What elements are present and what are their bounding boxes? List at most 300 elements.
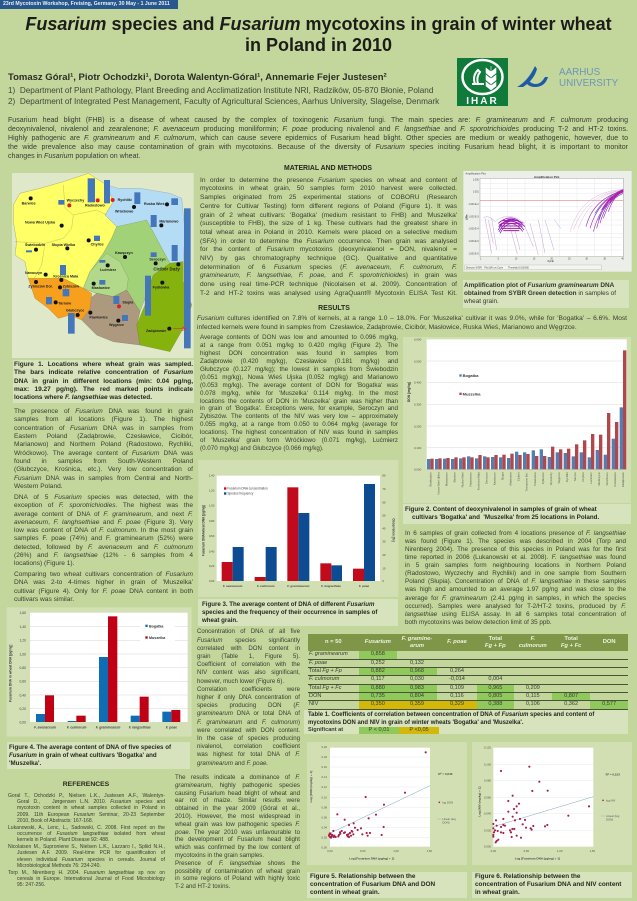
chart: Figure 2 bar chart: Zybiszów (541, 471, 545, 484)
chart: Figure 6 scatter plot: 0,000 (484, 845, 491, 849)
table: correlation coefficients: 0,359 (410, 701, 424, 707)
chart: Figure 3 bar chart: Occurrence [%] (391, 518, 395, 542)
table: correlation coefficients: 0,030 (410, 676, 424, 682)
text: DON results: 0.055 mg/kg, at a range from 0.050 to 0.064 mg/kg (average for (200, 421, 398, 428)
text: species and the frequency of their occurrence in samples of (202, 609, 377, 616)
text: Figure 5. Relationship between the (310, 873, 415, 880)
text: DON results: (0.053 mg/kg). The average content of DON for 'Bogatka' was (200, 382, 398, 389)
caption: Figure 3 (198, 599, 398, 626)
chart: Figure 2 bar chart: 0,400 (414, 381, 422, 385)
text: comparing cultivars: cultivar (Figure 4). Only for F. poae DNA content in both (14, 588, 193, 595)
affiliations (8, 86, 440, 106)
text: material and methods: mycotoxins in wheat grain, 50 samples form 2010 harvest were collected. (200, 185, 457, 192)
title: in Poland in 2010 (245, 34, 392, 54)
table: correlation coefficients: Fg + Fc (561, 643, 581, 649)
table: correlation coefficients: 0,807 (564, 693, 578, 699)
chart: amplification plot: ΔRn (464, 214, 468, 220)
text: F. langsethiae results: In 6 samples of grain collected from 4 locations presence of F. langsethiae (405, 530, 626, 537)
text: results intro (197, 315, 627, 331)
chart: Figure 3 bar chart: F. langsethiae (321, 584, 341, 588)
text: Fusarium DNA presence: Marianowo) and Northern Poland (Radostowo, Rychliki, (14, 441, 193, 448)
chart: amplification plot: Amplification Plot (465, 171, 486, 175)
chart: Figure 5 scatter plot: 0,00 (327, 849, 333, 853)
text: comparing cultivars: Comparing two wheat cultivars concentration of Fusarium (14, 571, 193, 578)
table: correlation coefficients (308, 634, 628, 710)
text: F. langsethiae results: was high and amounted to an average 1.97 pg/ng and was close to the (405, 586, 626, 593)
text: material and methods: determination of 6 Fusarium species (F. avenaceum, F. culmorum, F. (200, 264, 457, 271)
text: correlation discussion: correlated with DON content in (197, 645, 300, 652)
chart: Figure 2 bar chart: Radostowo (468, 472, 472, 486)
chart: Figure 5 scatter plot: DON) (442, 820, 450, 824)
text: material and methods: graminearum, F. langsethiae, F. poae, and F. sporotrichioides) in grain was (200, 272, 457, 279)
references list: Goral T., Ochodzki P., Nielsen L.K., Justesen A.F., Walentyn- (8, 792, 165, 798)
table: correlation coefficients: 0,735 (371, 693, 385, 699)
chart: Figure 4 bar chart: F. poae (166, 725, 177, 729)
chart: Figure 4 bar chart: 1,40 (20, 625, 26, 629)
chart: Figure 4 bar chart: F. culmorum (67, 725, 87, 729)
chart: Figure 2 bar chart: Cicibór (516, 472, 520, 481)
references list: Goral D., Jørgensen L.N. 2010. Fusarium species and (17, 799, 165, 805)
references list: 95: 247-256. (17, 882, 45, 888)
text: five species detected: exception of F. sporotrichiodies. The highest was the (14, 502, 193, 509)
text: correlation discussion: NIV content was also significant, (197, 669, 300, 676)
chart: Figure 3 bar chart: 1,40 (209, 474, 215, 478)
text: F. langsethiae results: average for F. graminearum (2.41 pg/ng in samples, in which the species (405, 594, 626, 602)
chart: Figure 3 bar chart: F. graminearum (287, 584, 310, 588)
text: Fusarium in grain of wheat cultivars 'Bogatka' and (9, 752, 157, 759)
text: five species detected: (26%) and F. langsethiae (12% - 6 samples from 4 (14, 552, 193, 559)
text: conclusions: the development of Fusarium head blight (175, 836, 300, 843)
chart: Figure 2 bar chart: Słupia (500, 472, 504, 480)
chart: Figure 3 bar chart: F. avenaceum (223, 584, 243, 588)
text: wheat grain. (464, 298, 499, 305)
table: correlation coefficients: 0,804 (410, 693, 424, 699)
text: correlation discussion: species producing DON (F. (197, 702, 300, 709)
text: max: 19.27 pg/ng). The red marked points indicate (14, 386, 193, 393)
text: conclusions: causing Fusarium head blight of wheat and (175, 790, 300, 797)
text: material and methods: In order to determine the presence Fusarium species on wheat and content of (200, 177, 457, 184)
chart: amplification plot: 1.000 E-2 (469, 204, 479, 206)
chart: Figure 3 bar chart: F. poae (359, 584, 369, 588)
chart: Figure 2 bar chart: DON [mg/kg] (407, 382, 411, 402)
introduction text: deoxynivalenol, nivalenol and zearalenone; F. avenaceum producing moniliformin; F. poae producing nivalenol and F. langsethiae and F. sporotrichioides producing T-2 and HT-2 toxins. (8, 126, 628, 133)
text: DON results: (0.070 mg/kg) and Głubczyce (0.066 mg/kg). (200, 445, 324, 452)
table: correlation coefficients: 0,965 (488, 685, 502, 691)
chart: Figure 6 scatter plot: 1,00 (557, 849, 563, 853)
affiliations: 1) Department of Plant Pathology, Plant Breeding and Acclimatization Institute NRI, Radzików, 05-870 Błonie, Poland (8, 86, 433, 95)
text: Amplification plot of Fusarium graminearum DNA (464, 282, 614, 289)
text: DON results: Zybiszów. The contents of the NIV was very low – approximately (200, 413, 398, 420)
text: correlation discussion: Fusarium species significantly (197, 637, 300, 644)
chart: Figure 5 scatter plot: 0,10 (321, 795, 327, 799)
references list: Microbiological Methods 76: 234-240. (17, 863, 101, 869)
chart: Figure 6 scatter plot: DON) (606, 817, 613, 821)
chart: Figure 2 bar chart: 0,100 (414, 446, 422, 450)
chart: Figure 3 bar chart: 0,40 (209, 549, 215, 553)
references list: mycotoxin content in wheat samples collected in Poland in (17, 805, 165, 811)
text: conclusions: ear rot of maize. Similar results were (175, 797, 300, 804)
table: correlation coefficients: 0,004 (488, 676, 502, 682)
chart: Figure 3 bar chart: 1,00 (209, 504, 215, 508)
table: correlation coefficients: Total (489, 636, 502, 642)
heading: results: RESULTS (318, 305, 350, 312)
chart: Figure 2 bar chart: Głubczyce (597, 472, 601, 486)
text: material and methods: Samples originated from 25 experimental stations of COBORU (Research (200, 194, 457, 201)
chart: Figure 4 bar chart: Fusarium DNA in wheat DNA [pg/ng] (9, 645, 13, 702)
chart: Figure 2 bar chart: Czesławice (613, 472, 617, 487)
chart: Figure 3 bar chart: 0,20 (209, 564, 215, 568)
text: conclusions: possibility of contamination of wheat grain (175, 868, 300, 875)
table: correlation coefficients: 0,106 (526, 701, 540, 707)
chart: Figure 2 bar chart: Chylice (581, 472, 585, 482)
chart: amplification plot: Cycle (548, 261, 554, 263)
chart: Figure 2 bar chart: Lućmierz (589, 472, 593, 484)
table: correlation coefficients: F. poae (309, 660, 327, 666)
chart: Figure 2 bar chart: Wróćkowo (605, 472, 609, 485)
text: correlation discussion: however, much lower (Figure 6). (197, 678, 284, 685)
text: concentration of Fusarium DNA and NIV content (475, 881, 621, 888)
text: material and methods: (susceptible to FHB), the size of 1 kg. These cultivars had the greatest share in (200, 220, 457, 227)
text: material and methods (200, 177, 457, 297)
panel: map of Poland, Figure 1: Wróćkowo (115, 210, 134, 214)
panel: map of Poland, Figure 1: Wyczechy (67, 199, 85, 203)
chart: amplification plot: 30 (585, 258, 589, 260)
text: material and methods: done using real time-PCR technique (Nicolaisen et al. 2009). Concentration of (200, 281, 457, 288)
chart: Figure 2 bar chart: Tomaszów Bol. (524, 472, 528, 491)
text: cultivars 'Bogatka' and 'Muszelka' from 25 locations in Poland. (412, 514, 599, 521)
panel: map of Poland, Figure 1: Masłowice (92, 286, 110, 290)
panel: map of Poland, Figure 1: Cicibór Duży (153, 266, 180, 271)
chart: amplification plot: 1.000 E-6 (469, 253, 479, 255)
references list: cereals in Europe. International Journal of Food Microbiology (17, 876, 165, 882)
chart: Figure 5 scatter plot: 0,18 (321, 755, 327, 759)
chart: Figure 6 scatter plot: 0,080 (484, 779, 491, 783)
text: five species detected: low was content of DNA of F. culmorum. In the most grain (14, 527, 193, 534)
chart: Figure 3 bar chart: Fusarium DNA concentration (227, 487, 268, 491)
panel: map of Poland, Figure 1: Słupia Wielka (52, 243, 76, 247)
chart: amplification plot: 15 (533, 258, 536, 260)
chart: Figure 4 bar chart: F. avenaceum (34, 725, 56, 729)
chart: Figure 4 bar chart: 1,00 (20, 652, 26, 656)
text: correlation discussion (197, 628, 300, 767)
text: Figure 4. The average content of DNA of five species of (9, 744, 171, 751)
panel: map of Poland, Figure 1: Świebodzin (25, 242, 45, 247)
text: F. langsethiae results: time reported in 2006 (Lukanowski et al. 2008). F. langsethiae was found (405, 554, 626, 561)
chart: Figure 5 scatter plot: 0,00 (321, 845, 327, 849)
chart: Figure 4 bar chart: F. graminearum (96, 725, 120, 729)
references list: eleven individual Fusarium species in cereals. Journal of (17, 857, 165, 863)
chart: amplification plot (463, 171, 632, 272)
panel: map of Poland, Figure 1: Węgrzce (109, 323, 124, 327)
text: DON results: Average contents of DON was low and amounted to 0.096 mg/kg, (200, 334, 398, 341)
chart: Figure 6 scatter plot: 0,50 (524, 849, 530, 853)
chart: Figure 5 scatter plot: 0,20 (321, 745, 327, 749)
chart: Figure 3 bar chart: 30 (382, 540, 386, 544)
references list: 2010, Book of Abstracts: 167-168. (17, 818, 93, 824)
chart: Figure 6 scatter plot: 0,00 (491, 849, 497, 853)
text: DON results: locations the contents of DON in 'Muszelka' grain was higher than (200, 398, 398, 404)
table: correlation coefficients: F. graminearum (309, 651, 348, 657)
logo: Aarhus University (517, 66, 618, 89)
panel: map of Poland, Figure 1: Zybiszów Dol. (28, 285, 53, 289)
chart: Figure 3 bar chart: 50 (382, 513, 386, 517)
text: concentration of Fusarium DNA and DON (310, 881, 435, 888)
text: conclusions: mycotoxins in the grain samples. (175, 852, 264, 859)
chart: amplification plot: Detector SYBR Plot ΔRn vs Cycle Threshold 0.100000 (466, 266, 530, 269)
table: correlation coefficients: 0,132 (410, 660, 424, 666)
text: five species detected (14, 494, 193, 567)
chart: Figure 5 scatter plot: Linear (log (442, 817, 456, 821)
chart: Figure 5 scatter plot: 1,00 (393, 849, 399, 853)
text: comparing cultivars: DNA was 2-to 4-times higher in grain of 'Muszelka' (14, 579, 193, 586)
references list (8, 792, 165, 888)
introduction text: the wide prevalence also may cause contamination of grain with mycotoxins. Because of the diversity of Fusarium species inciting Fusarium head blight, it is important to monitor (8, 144, 628, 151)
panel: map of Poland, Figure 1 (12, 173, 194, 358)
text: material and methods: grain of 2 wheat cultivars: 'Bogatka' (medium resistant to FHB) and 'Muszelka' (200, 212, 457, 218)
table: correlation coefficients: NIV (309, 701, 318, 707)
text: DON results: Zadąbrowie (0.420 mg/kg), Czesławice (0.181 mg/kg) and (200, 358, 398, 365)
chart: Figure 6 scatter plot: 0,040 (484, 812, 491, 816)
chart: Figure 5 scatter plot: 0,50 (360, 849, 366, 853)
chart: amplification plot: 1.000 E-5 (469, 241, 479, 243)
chart: Figure 5 scatter plot: Log [DON (mg/kg) + 1] (309, 771, 313, 803)
chart: Figure 6 scatter plot: Log [NIV (mg/kg) + 1] (477, 787, 481, 817)
chart: Figure 3 bar chart: 80 (382, 474, 386, 478)
caption: Table 1 with significance legend: Table 1. Coefficients of correlation between concentration of DNA of Fusarium species and content of (308, 712, 594, 718)
table: correlation coefficients: 0,117 (371, 676, 385, 682)
chart: Figure 6 scatter plot: Log [Fusarium DNA (pg/ng) + 1] (515, 857, 560, 861)
text: Fusarium DNA presence: found in samples from South-Western Poland (14, 458, 193, 465)
chart: Figure 4 bar chart: 0,40 (20, 693, 26, 697)
chart: amplification plot: 40 (621, 258, 625, 260)
chart: Figure 2 bar chart: Tarnów (573, 471, 577, 481)
chart: Figure 3 bar chart: 40 (382, 526, 386, 530)
chart: Figure 4 bar chart (6, 608, 192, 736)
chart: amplification plot: 1 (480, 258, 482, 260)
text: content in wheat grain. (310, 889, 380, 896)
text: conclusions: poae. The year 2010 was unfavourable to (175, 829, 300, 836)
chart: Figure 5 scatter plot: R² = 0,640 (438, 772, 453, 776)
logo: Aarhus University: UNIVERSITY (559, 78, 618, 89)
text: conclusions (174, 774, 300, 890)
text: correlation discussion: Concentration of DNA of all five (197, 628, 300, 635)
chart: Figure 3 bar chart: 60 (382, 500, 386, 504)
text: F. langsethiae results: Nirenberg 2004). The presence of this species in Poland was for the first (405, 546, 626, 553)
text: DON results: of 'Muszelka' grain form Wróćkiowo (0.071 mg/kg), Lućmierz (200, 437, 398, 444)
chart: amplification plot: 1.000 (473, 179, 479, 181)
conference banner: 23rd Mycotoxin Workshop, Freising, Germany, 30 May - 1 June 2011 (3, 1, 170, 7)
chart: Figure 5 scatter plot (307, 742, 467, 865)
chart: Figure 3 bar chart: 0 (382, 579, 384, 583)
text: conclusions: wheat grain was low pathogenic species F. (175, 821, 300, 828)
text: comparing cultivars (14, 571, 193, 603)
chart: Figure 6 scatter plot: 0,060 (484, 795, 491, 799)
table: correlation coefficients: 0,115 (526, 693, 540, 699)
table: correlation coefficients: Total (564, 636, 578, 642)
text: five species detected: locations) (Figure 1). (14, 560, 74, 567)
chart: Figure 6 scatter plot: log NIV (606, 798, 615, 802)
text: conclusions: 2010). However, the most widespread in (175, 813, 300, 820)
text: Figure 2. Content of deoxynivalenol in samples of grain of wheat (405, 506, 597, 513)
chart: amplification plot: 1.000 E-3 (469, 216, 479, 218)
chart: Figure 2 bar chart: Rychliki (565, 472, 569, 482)
text: DON results: locations). The highest concentration of NIV was found in samples (200, 429, 398, 436)
text: DON results: in grain of 'Bogatka'. Exceptions were, for example, Seroczyn and (200, 405, 398, 412)
table: correlation coefficients: DON (603, 639, 616, 645)
table: correlation coefficients: 0,116 (450, 693, 464, 699)
chart: Figure 3 bar chart: F. culmorum (257, 584, 275, 588)
references list: 2009. 11th European Fusarium Seminar, 20-23 September (17, 812, 165, 818)
text: five species detected: detected, followed by F. avenaceum and F. culmorum (14, 544, 193, 550)
chart: Figure 3 bar chart (198, 460, 398, 597)
table: correlation coefficients: F. culmorum (309, 676, 339, 682)
text: DON results: highest DON concentration was found in samples from (200, 350, 398, 357)
table: correlation coefficients: 0,968 (410, 668, 424, 674)
panel: map of Poland, Figure 1: Tarnów (58, 301, 71, 305)
caption: Table 1 with significance legend: mycotoxins DON and NIV in grain of winter wheats 'Bogatka' and 'Muszelka'. (308, 720, 523, 726)
table: correlation coefficients: 0,362 (564, 701, 578, 707)
table: correlation coefficients: 0,983 (410, 685, 424, 691)
introduction text (8, 116, 628, 160)
table: correlation coefficients: 0,388 (488, 701, 502, 707)
chart: Figure 3 bar chart: Fusarium DNA/wheat DNA [pg/ng] (201, 505, 205, 556)
introduction text: changes in Fusarium population on wheat. (8, 153, 140, 160)
panel: map of Poland, Figure 1: Chylice (91, 243, 104, 247)
table: correlation coefficients: 0,880 (371, 685, 385, 691)
text: 'Muszelka'. (9, 760, 41, 767)
caption: Table 1 with significance legend: Significant at (308, 727, 343, 733)
text: DON results: Głubczyce (0.127 mg/kg); the lowest in samples from Świebodzin (200, 366, 398, 373)
text: conclusions: T-2 and HT-2 toxins. (175, 883, 230, 890)
panel: map of Poland, Figure 1: Ruska Wieś (144, 202, 164, 206)
text: material and methods: total wheat area in Poland in 2010. Kernels were placed on a selective medium (200, 229, 457, 236)
text: DON results: at a range from 0.051 mg/kg to 0.420 mg/kg (Figure 2). The (200, 342, 398, 349)
text: correlation discussion: graminearum and F. poae. (197, 760, 268, 767)
chart: Figure 2 bar chart (403, 337, 631, 503)
text: conclusions: The results indicate a dominance of F. (175, 774, 300, 781)
chart: Figure 5 scatter plot: 0,12 (321, 785, 327, 789)
chart: Figure 2 bar chart: Marianowo (444, 472, 448, 486)
table: correlation coefficients: culmorum (519, 643, 547, 649)
table: correlation coefficients: -0,014 (449, 676, 465, 682)
references list: Justesen A.F. 2009. Real-time PCR for quantification of (17, 850, 165, 856)
authors: Tomasz Góral¹, Piotr Ochodzki¹, Dorota Walentyn-Góral¹, Annemarie Fejer Justesen² (8, 72, 387, 83)
text: Figure 6. Relationship between the (475, 873, 580, 880)
chart: Figure 4 bar chart: 0,60 (20, 680, 26, 684)
text: correlation discussion: Correlation coefficients were (197, 686, 300, 693)
introduction text: Fusarium head blight (FHB) is a disease of wheat caused by the complex of toxinogenic Fusarium fungi. The main species are: F. graminearum and F. culmorum producing (8, 116, 628, 124)
text: in wheat grain. (475, 889, 520, 896)
table: correlation coefficients: F. poae (447, 639, 467, 645)
chart: Figure 3 bar chart: 0,60 (209, 534, 215, 538)
text: correlation discussion: was highest for total DNA of F. (197, 751, 300, 758)
chart: Figure 2 bar chart: Muszelka (463, 392, 481, 397)
references list: Nicolaisen M., Suproniene S., Nielsen L.K., Lazzaro I., Spliid N.H., (8, 844, 165, 850)
chart: Figure 2 bar chart: Kawęczyn (492, 472, 496, 485)
table: correlation coefficients: 0,350 (371, 701, 385, 707)
text: five species detected: avenaceum, F. langhsethiae and F. poae (Figure 3). Very (14, 519, 193, 526)
text: F. langsethiae results (405, 530, 626, 626)
chart: amplification plot: 20 (550, 258, 554, 260)
table: correlation coefficients: 0,209 (526, 685, 540, 691)
text: material and methods: NIV) by gas chromatography technique (GC). Qualitative and quantitative (200, 255, 457, 262)
text: Fusarium DNA presence: Fusarium DNA was in samples from Central and North- (14, 475, 193, 482)
chart: Figure 4 bar chart: F. langsethiae (129, 725, 151, 729)
text: DON results: (0.051 mg/kg), Nowa Wieś Ujska (0.052 mg/kg) and Marianowo (200, 374, 398, 381)
heading: references: REFERENCES (63, 781, 109, 788)
chart: Figure 6 scatter plot: Linear (log (606, 814, 620, 818)
panel: map of Poland, Figure 1: Pawłowice (89, 315, 108, 319)
text: F. langsethiae results: was found (Figure 1). The species was described in 2004 (Torp and (405, 538, 626, 545)
text: Figure 3. The average content of DNA of different Fusarium (202, 601, 374, 608)
panel: map of Poland, Figure 1: Barwice (22, 201, 36, 205)
caption: Table 1 with significance legend (304, 710, 628, 734)
text: F. langsethiae results: Poland (Słupia). Concentration of DNA of F. langsethiae in these samples (405, 578, 626, 585)
text: DNA in grain in different locations (min: 0.04 pg/ng, (14, 378, 193, 385)
chart: Figure 3 bar chart: Species frequency (227, 492, 254, 496)
text: correlation discussion: F. graminearum and F. culmorum) (197, 719, 300, 726)
affiliations: 2) Department of Integrated Pest Management, Faculty of Agricultural Sciences, Aarhus University, Slagelse, Denmark (8, 96, 439, 106)
text: correlation discussion: grain (Table 1, Figure 5). (197, 653, 300, 660)
logo: Aarhus University: AARHUS (559, 67, 600, 78)
text: F. langsethiae results: langsethiae using ELISA assay. In all 6 samples total concentration of (405, 611, 626, 618)
panel: map of Poland, Figure 1: Zybiszów (63, 284, 79, 288)
caption: Figure 4 (7, 742, 190, 769)
text: Fusarium DNA presence: Western Poland. (14, 483, 63, 490)
text: Fusarium DNA presence: The presence of Fusarium DNA was found in grain (14, 408, 193, 415)
chart: Figure 2 bar chart: 0,600 (414, 338, 422, 342)
references list: Lukanowski, A., Lenc, L., Sadowski, C. 2008. First report on the (8, 825, 165, 831)
caption: Figure 1 (13, 360, 194, 403)
chart: Figure 2 bar chart: Seroczyn (484, 472, 488, 484)
text: F. langsethiae results: occurred). Samples were analysed for T-2/HT-2 toxins, produced by F. (405, 603, 626, 610)
chart: Figure 5 scatter plot: Log [Fusarium DNA (pg/ng) + 1] (349, 857, 394, 861)
chart: Figure 2 bar chart: Nowa Wieś Ujska (436, 472, 440, 495)
chart: Figure 3 bar chart: 10 (382, 566, 386, 570)
chart: Figure 6 scatter plot: 0,100 (484, 762, 491, 766)
introduction text: Highly pathogenic are F. graminearum and F. culmorum, which can cause severe epidemics of Fusarium head blight. Other species are medium or weakly pathogenic, however, due to (8, 135, 628, 142)
text: correlation discussion: were correlated with DON content. (197, 727, 300, 734)
text: correlation discussion: nivalenol, correlation coefficient (197, 743, 300, 750)
panel: map of Poland, Figure 1: Kawęczyn (115, 251, 133, 255)
text: Fusarium DNA presence (14, 408, 193, 490)
heading: material and methods: MATERIAL AND METHODS (284, 165, 372, 172)
text: material and methods: T-2 and HT-2 toxins was analysed using AgraQuant® Mycotoxin ELISA Test Kit. (200, 290, 457, 297)
references list: kernels in Poland. Plant Disease 92: 488. (17, 837, 109, 843)
chart: Figure 4 bar chart: 1,20 (20, 639, 26, 643)
text: obtained from SYBR Green detection in samples of (464, 290, 616, 297)
chart: Figure 4 bar chart: Muszelka (149, 636, 166, 640)
text: conclusions: in some regions of Poland with highly toxic (175, 875, 300, 882)
chart: Figure 3 bar chart: 0,80 (209, 519, 215, 523)
chart: Figure 4 bar chart: Bogatka (149, 624, 164, 628)
chart: Figure 3 bar chart: 1,20 (209, 489, 215, 493)
caption: Table 1 with significance legend: P < 0,01 (369, 727, 389, 733)
table: correlation coefficients: 0,858 (371, 651, 385, 657)
chart: Figure 6 scatter plot: 0,020 (484, 828, 491, 832)
caption: Figure 6 (472, 872, 632, 898)
table: correlation coefficients: F. gramine-arum (402, 636, 432, 649)
chart: Figure 5 scatter plot: 0,14 (321, 775, 327, 779)
panel: map of Poland, Figure 1: Rychliki (118, 198, 132, 202)
title (25, 14, 612, 54)
logo: IHAR: IHAR (466, 96, 499, 107)
chart: Figure 6 scatter plot: 0,120 (484, 746, 491, 750)
chart: Figure 4 bar chart: 0,00 (20, 720, 26, 724)
text: Fusarium DNA presence: (Głubczyce, Krośnica, etc.). Very low concentration of (14, 466, 193, 473)
chart: Figure 3 bar chart: 20 (382, 553, 386, 557)
caption: Figure 5 (307, 872, 467, 898)
